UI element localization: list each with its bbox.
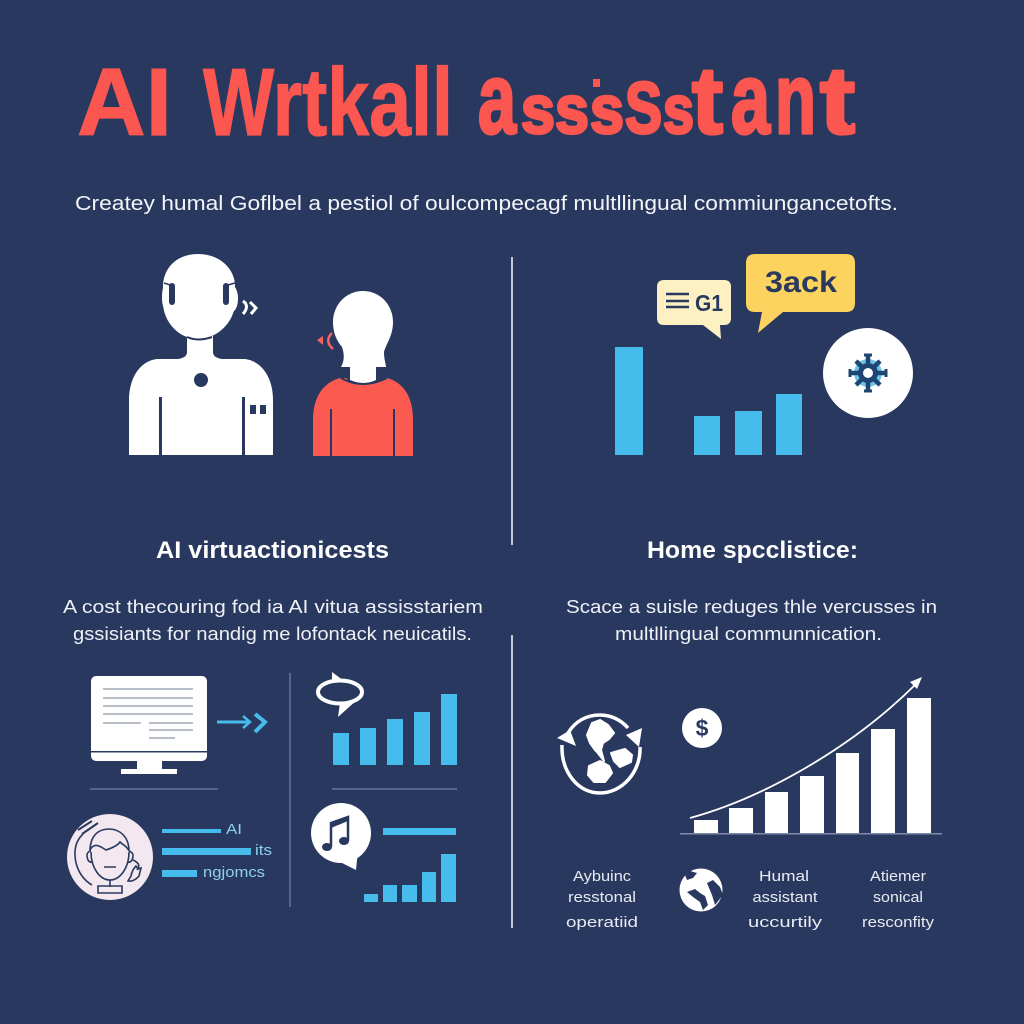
heading: right column: Home spcclistice: xyxy=(647,537,858,564)
bar chart: upper middle xyxy=(333,694,457,765)
icon: loop speech xyxy=(318,672,362,717)
title: t xyxy=(692,48,723,154)
label column 3: resconfity xyxy=(862,914,935,931)
bar chart: growth xyxy=(680,677,942,834)
icon: dollar coin xyxy=(682,708,722,748)
speech bubble: 3ack xyxy=(746,254,855,333)
icon: monitor with text lines xyxy=(91,676,207,774)
label column 2 xyxy=(748,868,823,931)
label column 1 xyxy=(566,868,638,931)
title: a xyxy=(731,43,771,155)
icon: human figure in red sweater xyxy=(313,291,413,456)
label column 1: Aybuinc xyxy=(573,868,632,885)
text block: left column: gssisiants for nandig me lofontack neuicatils. xyxy=(73,624,472,644)
label column 3 xyxy=(862,868,935,931)
label column 1: resstonal xyxy=(568,889,636,906)
divider top xyxy=(511,257,513,545)
legend list with bars xyxy=(162,821,272,881)
title: s xyxy=(521,72,555,148)
title: S xyxy=(625,69,662,149)
bar chart: lower middle xyxy=(364,828,456,902)
title: Wrtkall xyxy=(203,49,453,156)
heading: left column: AI virtuactionicests xyxy=(156,537,389,564)
title: AI xyxy=(77,49,172,156)
label column 2: uccurtily xyxy=(748,914,823,931)
title: s xyxy=(555,72,589,148)
title xyxy=(77,43,855,156)
icon: gear badge xyxy=(823,328,913,418)
label column 3: sonical xyxy=(873,889,923,906)
arrow xyxy=(217,714,265,732)
title: s xyxy=(663,72,694,148)
bar chart top right xyxy=(615,347,802,455)
divider bottom xyxy=(511,635,513,928)
arrow: growth trend xyxy=(690,677,922,818)
text block: left column xyxy=(63,597,483,644)
label column 2: assistant xyxy=(752,889,818,906)
icon: small globe xyxy=(680,868,723,912)
title: n xyxy=(775,43,816,155)
speech bubble: G1: G1 xyxy=(695,290,723,316)
speech bubble: 3ack: 3ack xyxy=(765,266,837,299)
speech bubble: G1 xyxy=(657,280,731,339)
subtitle: Createy humal Goflbel a pestiol of oulcompecagf multllingual commiungancetofts. xyxy=(75,193,898,215)
legend list with bars: AI xyxy=(226,821,242,838)
label column 2: Humal xyxy=(759,868,809,885)
icon: dollar coin: $ xyxy=(696,715,709,741)
text block: right column: Scace a suisle reduges thle vercusses in xyxy=(566,597,937,617)
inner dividers xyxy=(90,673,457,907)
icon: AI figure with headset xyxy=(129,254,273,455)
title: : xyxy=(845,101,854,131)
text block: left column: A cost thecouring fod ia AI vitua assisstariem xyxy=(63,597,483,617)
legend list with bars: ngjomcs xyxy=(203,864,265,881)
icon: music speech bubble xyxy=(311,803,371,870)
title: s xyxy=(590,72,624,148)
title: a xyxy=(478,43,517,155)
text block: right column xyxy=(566,597,937,644)
icon: globe with rotating arrows xyxy=(557,715,642,793)
label column 3: Atiemer xyxy=(870,868,926,885)
text block: right column: multllingual communnication. xyxy=(615,624,882,644)
legend list with bars: its xyxy=(255,842,272,859)
label column 1: operatiid xyxy=(566,914,638,931)
icon: support agent avatar xyxy=(67,814,153,900)
title: t xyxy=(820,48,855,154)
